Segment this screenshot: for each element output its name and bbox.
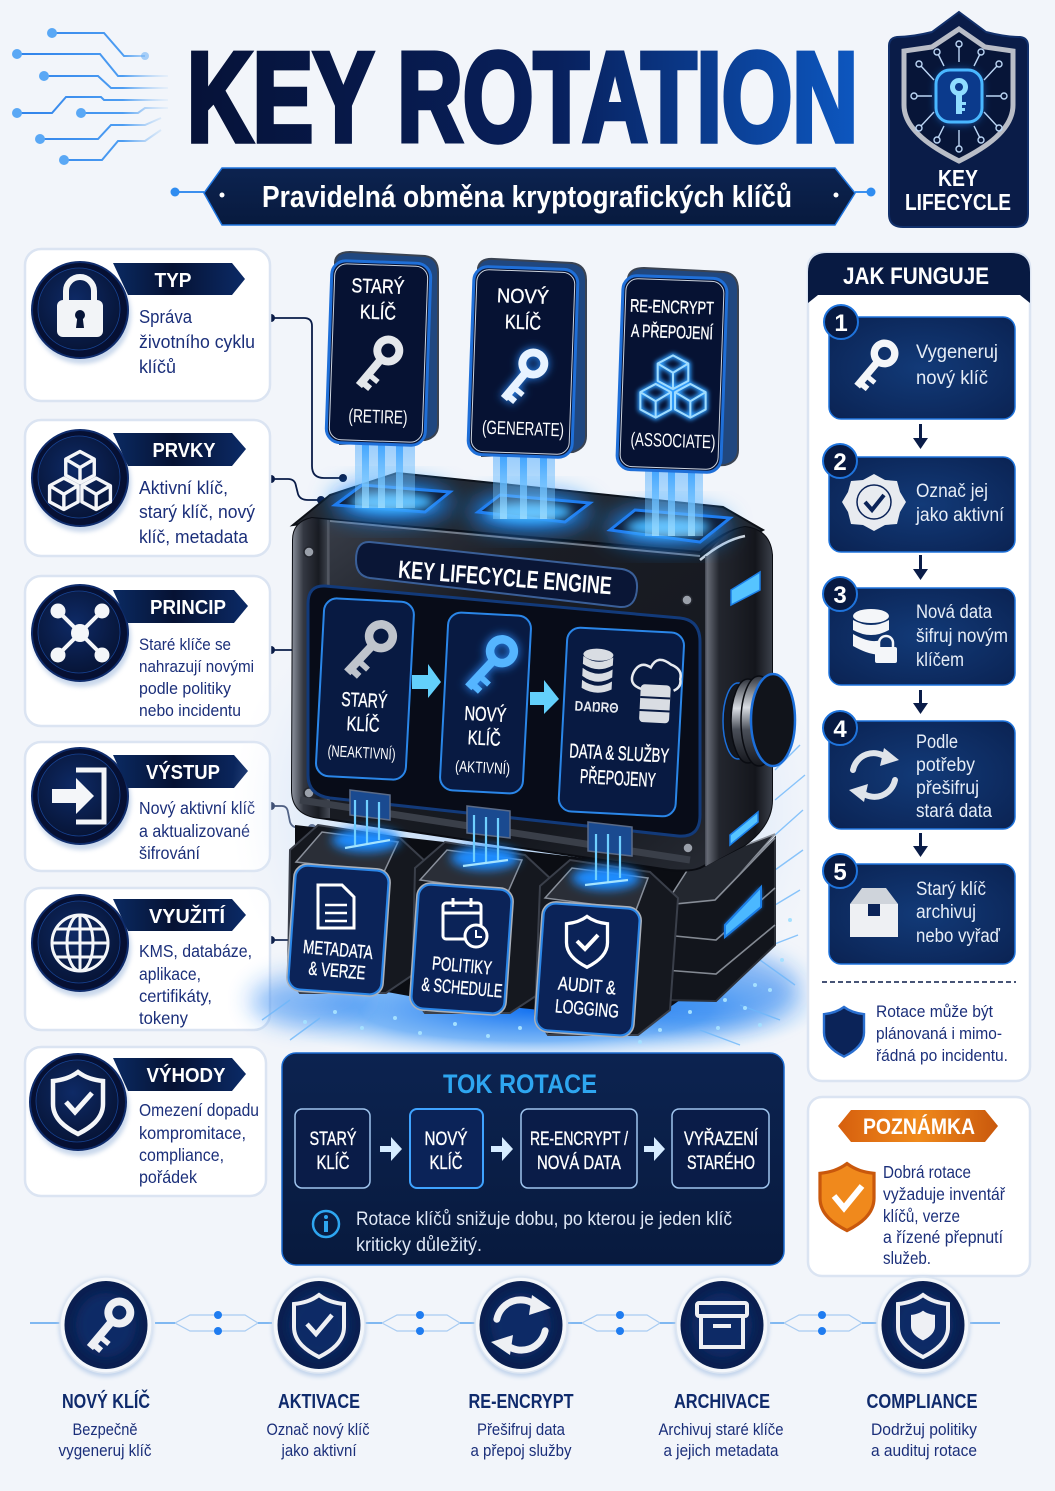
machine: key lifecycle engine bbox=[288, 440, 795, 1036]
screen bbox=[308, 586, 700, 836]
arrow bbox=[491, 1137, 513, 1161]
panel: JAK FUNGUJE bbox=[808, 253, 1030, 1081]
panel: TYP bbox=[25, 249, 270, 401]
flow step: STARÉHO bbox=[687, 1153, 755, 1174]
top glowing slots bbox=[332, 484, 730, 545]
bottom cube: policies bbox=[411, 842, 552, 1014]
top card: new key generate: KLÍČ bbox=[505, 310, 541, 335]
orange heading: POZNÁMKA bbox=[863, 1114, 975, 1139]
bottom cube: metadata: METADATA bbox=[302, 937, 374, 964]
top surface bbox=[293, 473, 763, 560]
text block bbox=[139, 477, 256, 547]
text block bbox=[139, 1100, 259, 1187]
step: AKTIVACE: jako aktivní bbox=[281, 1441, 357, 1460]
flow step bbox=[672, 1109, 769, 1188]
step 1: nový klíč bbox=[916, 368, 988, 389]
icon: archive box bbox=[675, 1277, 769, 1377]
step 3: šifruj novým bbox=[916, 626, 1008, 647]
icon: rotate bbox=[474, 1277, 568, 1377]
top card: old key retire: KLÍČ bbox=[360, 300, 396, 325]
knob bbox=[723, 674, 795, 766]
bottom cube: policies: & SCHEDULE bbox=[421, 975, 503, 1002]
text block: a řízené přepnutí bbox=[883, 1227, 1003, 1247]
step 2: Označ jej bbox=[916, 481, 988, 502]
screen arrow bbox=[530, 680, 559, 714]
top card: old key retire bbox=[326, 252, 438, 446]
text block: certifikáty, bbox=[139, 986, 212, 1006]
step: NOVÝ KLÍČ: vygeneruj klíč bbox=[58, 1441, 152, 1460]
bottom cube: audit bbox=[535, 860, 678, 1036]
bottom cube: audit: LOGGING bbox=[554, 996, 620, 1023]
lower rail bbox=[300, 800, 690, 860]
icon: shield with key bbox=[904, 29, 1013, 161]
icon: cloud server bbox=[630, 658, 682, 724]
callout text bbox=[356, 1209, 732, 1256]
badge: key lifecycle: LIFECYCLE bbox=[905, 189, 1011, 215]
flow step: KLÍČ bbox=[316, 1152, 350, 1174]
text block: aplikace, bbox=[139, 964, 201, 984]
icon: cubes bbox=[32, 430, 131, 532]
text block bbox=[139, 306, 255, 377]
circuit lines: top left decoration bbox=[12, 28, 168, 165]
text block: podle politiky bbox=[139, 679, 231, 698]
panel: TOK ROTACE bbox=[282, 1053, 784, 1265]
metal right side face bbox=[706, 527, 772, 866]
screen panel: new key bbox=[439, 612, 532, 794]
beams bbox=[355, 440, 703, 536]
heading ribbon: PRVKY bbox=[152, 440, 216, 462]
step: NOVÝ KLÍČ: Bezpečně bbox=[72, 1420, 138, 1439]
step 4: potřeby bbox=[916, 755, 975, 776]
top card: new key generate: NOVÝ bbox=[497, 284, 549, 309]
note with shield bbox=[824, 1002, 1008, 1065]
step 4: přešifruj bbox=[916, 778, 979, 799]
floor glow and light rays bbox=[230, 540, 830, 1080]
flow step: KLÍČ bbox=[430, 1152, 462, 1174]
step: ARCHIVACE: ARCHIVACE bbox=[674, 1391, 770, 1413]
screen panel: new key: NOVÝ bbox=[464, 702, 507, 727]
text block: životního cyklu bbox=[139, 331, 255, 352]
heading ribbon: VÝHODY bbox=[146, 1063, 226, 1087]
flow step: RE-ENCRYPT / bbox=[530, 1129, 629, 1150]
panel: VÝHODY bbox=[25, 1047, 266, 1196]
step: ARCHIVACE: a jejich metadata bbox=[664, 1441, 779, 1460]
text block: pořádek bbox=[139, 1167, 197, 1187]
top card: re-encrypt associate bbox=[617, 268, 738, 473]
step 3 bbox=[823, 577, 1015, 685]
screen panel: old key: KLÍČ bbox=[346, 712, 380, 737]
text block: KMS, databáze, bbox=[139, 941, 252, 961]
callout text: Rotace klíčů snižuje dobu, po kterou je jeden klíč bbox=[356, 1209, 732, 1230]
step 3: Nová data bbox=[916, 602, 992, 623]
step 4 bbox=[823, 711, 1015, 829]
step: RE-ENCRYPT bbox=[468, 1277, 574, 1460]
icon: shield check bbox=[272, 1277, 366, 1377]
callout text: kriticky důležitý. bbox=[356, 1235, 482, 1256]
flow step bbox=[410, 1109, 483, 1188]
top card: old key retire: STARÝ bbox=[351, 274, 405, 299]
text block: Správa bbox=[139, 306, 193, 327]
step: COMPLIANCE: Dodržuj politiky bbox=[871, 1420, 977, 1439]
icon: lock bbox=[32, 262, 131, 364]
step 2: 2 bbox=[833, 449, 847, 476]
arrow bbox=[913, 424, 928, 449]
text block bbox=[883, 1162, 1006, 1268]
arrow bbox=[913, 690, 928, 714]
heading ribbon bbox=[113, 263, 245, 295]
step 2: jako aktivní bbox=[915, 505, 1005, 526]
top card: new key generate bbox=[468, 259, 586, 458]
screen panel: old key bbox=[315, 598, 415, 780]
step 1: 1 bbox=[834, 310, 848, 337]
icon: globe bbox=[32, 895, 131, 997]
icon: shield check bbox=[30, 1054, 129, 1156]
heading ribbon: VÝSTUP bbox=[146, 760, 220, 784]
step 5: archivuj bbox=[916, 902, 976, 923]
text block: Dobrá rotace bbox=[883, 1162, 971, 1182]
flow step: VYŘAZENÍ bbox=[684, 1128, 759, 1150]
panel: PRINCIP bbox=[25, 576, 270, 726]
icon: network bbox=[32, 585, 131, 687]
title plate: KEY LIFECYCLE ENGINE bbox=[397, 556, 613, 600]
panel: TOK ROTACE: TOK ROTACE bbox=[443, 1069, 597, 1099]
text block: Nový aktivní klíč bbox=[139, 798, 255, 818]
text block: a aktualizované bbox=[139, 821, 250, 841]
icon: exit arrow bbox=[32, 748, 131, 850]
text block: kompromitace, bbox=[139, 1123, 246, 1143]
panel: VYUŽITÍ bbox=[25, 888, 270, 1030]
top card: new key generate: (GENERATE) bbox=[482, 418, 564, 441]
top card: re-encrypt associate: A PŘEPOJENÍ bbox=[631, 321, 713, 343]
note with shield: Rotace může být bbox=[876, 1002, 993, 1021]
heading: JAK FUNGUJE bbox=[843, 263, 989, 290]
badge: key lifecycle bbox=[889, 12, 1028, 227]
step: NOVÝ KLÍČ: NOVÝ KLÍČ bbox=[62, 1389, 150, 1413]
step 4: Podle bbox=[916, 732, 958, 753]
arrow bbox=[913, 833, 928, 857]
step 3: klíčem bbox=[916, 650, 964, 671]
arrow bbox=[644, 1137, 665, 1161]
text block: nebo incidentu bbox=[139, 701, 241, 720]
text block: Omezení dopadu bbox=[139, 1100, 259, 1120]
step: COMPLIANCE bbox=[866, 1277, 978, 1460]
bottom timeline connectors bbox=[30, 1311, 1000, 1335]
metal left rim bbox=[292, 518, 330, 818]
flow step bbox=[521, 1109, 637, 1188]
arrow bbox=[913, 555, 928, 580]
step: RE-ENCRYPT: RE-ENCRYPT bbox=[468, 1391, 574, 1413]
text block bbox=[139, 941, 252, 1028]
orange heading bbox=[838, 1110, 998, 1142]
text block: šifrování bbox=[139, 843, 200, 863]
step 1 bbox=[824, 305, 1015, 419]
panel: VÝSTUP bbox=[25, 742, 270, 871]
heading ribbon: VYUŽITÍ bbox=[149, 904, 225, 928]
step: COMPLIANCE: COMPLIANCE bbox=[866, 1391, 978, 1413]
connector clamps with light lines bbox=[332, 790, 640, 890]
text block bbox=[139, 798, 255, 863]
bottom cube: audit: AUDIT & bbox=[557, 974, 617, 1000]
side lights bbox=[730, 572, 760, 845]
step 5 bbox=[823, 854, 1015, 964]
step: NOVÝ KLÍČ bbox=[58, 1277, 153, 1460]
heading ribbon bbox=[113, 433, 246, 466]
step: ARCHIVACE: Archivuj staré klíče bbox=[658, 1420, 784, 1439]
screen arrow bbox=[412, 664, 441, 698]
top card: re-encrypt associate: (ASSOCIATE) bbox=[630, 430, 716, 453]
step 5: Starý klíč bbox=[916, 879, 986, 900]
text block: klíč, metadata bbox=[139, 526, 249, 547]
text block: vyžaduje inventář bbox=[883, 1184, 1006, 1204]
step: AKTIVACE: AKTIVACE bbox=[278, 1391, 360, 1413]
step 5: 5 bbox=[833, 859, 847, 886]
text block bbox=[139, 635, 254, 720]
badge: key lifecycle: KEY bbox=[938, 165, 978, 191]
step 2 bbox=[823, 444, 1015, 552]
heading ribbon bbox=[113, 590, 248, 623]
screen panel: old key: STARÝ bbox=[341, 688, 388, 713]
step: COMPLIANCE: a audituj rotace bbox=[871, 1441, 977, 1460]
text block: klíčů bbox=[139, 356, 176, 377]
heading ribbon bbox=[113, 899, 246, 931]
step: AKTIVACE bbox=[266, 1277, 370, 1460]
arrow bbox=[380, 1137, 402, 1161]
heading ribbon: PRINCIP bbox=[150, 597, 226, 619]
note with shield: plánovaná i mimo- bbox=[876, 1024, 1002, 1043]
step 5: nebo vyřaď bbox=[916, 926, 1000, 947]
icon: database bbox=[581, 648, 614, 693]
text block: služeb. bbox=[883, 1248, 931, 1268]
flow step bbox=[295, 1109, 370, 1188]
icon: info bbox=[313, 1211, 339, 1237]
screen panel: old key: (NEAKTIVNÍ) bbox=[327, 741, 396, 764]
step 1: Vygeneruj bbox=[916, 342, 998, 363]
screen panel: data and services: DAŊRΘ bbox=[574, 698, 619, 716]
heading ribbon bbox=[113, 1058, 246, 1091]
step 4: stará data bbox=[916, 801, 992, 822]
text block: compliance, bbox=[139, 1145, 224, 1165]
connector lines from left cards to engine bbox=[267, 314, 347, 944]
panel: POZNÁMKA bbox=[808, 1097, 1030, 1276]
subtitle banner bbox=[170, 168, 876, 225]
bottom cube: policies: POLITIKY bbox=[431, 953, 493, 980]
bottom cube: metadata: & VERZE bbox=[308, 959, 366, 984]
screen panel: new key: KLÍČ bbox=[467, 726, 501, 751]
flow step: STARÝ bbox=[310, 1129, 357, 1150]
panel: PRVKY bbox=[25, 420, 270, 556]
text block: Staré klíče se bbox=[139, 635, 231, 654]
subtitle banner: Pravidelná obměna kryptografických klíčů bbox=[262, 179, 792, 214]
step 3: 3 bbox=[833, 582, 847, 609]
top card: old key retire: (RETIRE) bbox=[348, 406, 408, 429]
screen panel: data and services: PŘEPOJENY bbox=[579, 765, 656, 792]
front and side body bbox=[292, 518, 772, 871]
step: RE-ENCRYPT: a přepoj služby bbox=[470, 1441, 572, 1460]
title plate bbox=[356, 542, 637, 607]
text block: Aktivní klíč, bbox=[139, 477, 228, 498]
dark backing behind lower modules bbox=[295, 825, 690, 1028]
step: RE-ENCRYPT: Přešifruj data bbox=[477, 1420, 565, 1439]
heading ribbon bbox=[113, 755, 248, 788]
flow step: NOVÝ bbox=[424, 1129, 468, 1150]
heading bbox=[808, 253, 1030, 303]
screen panel: new key: (AKTIVNÍ) bbox=[455, 756, 511, 778]
screen panel: data and services: DATA & SLUŽBY bbox=[569, 739, 670, 768]
note with shield: řádná po incidentu. bbox=[876, 1046, 1008, 1065]
step 4: 4 bbox=[833, 716, 847, 743]
text block: nahrazují novými bbox=[139, 657, 254, 676]
text block: tokeny bbox=[139, 1008, 188, 1028]
heading ribbon: TYP bbox=[154, 270, 192, 292]
icon: orange shield bbox=[820, 1164, 874, 1231]
icon: key bbox=[59, 1277, 153, 1377]
text block: starý klíč, nový bbox=[139, 501, 256, 522]
step: AKTIVACE: Označ nový klíč bbox=[266, 1420, 370, 1439]
screen panel: data and services bbox=[558, 627, 685, 817]
text block: klíčů, verze bbox=[883, 1206, 960, 1226]
top card: re-encrypt associate: RE-ENCRYPT bbox=[630, 296, 714, 318]
bottom cube: metadata bbox=[288, 825, 426, 995]
base module bbox=[665, 834, 775, 1001]
step: ARCHIVACE bbox=[658, 1277, 784, 1460]
flow step: NOVÁ DATA bbox=[537, 1153, 621, 1174]
icon: double shield bbox=[876, 1277, 970, 1377]
